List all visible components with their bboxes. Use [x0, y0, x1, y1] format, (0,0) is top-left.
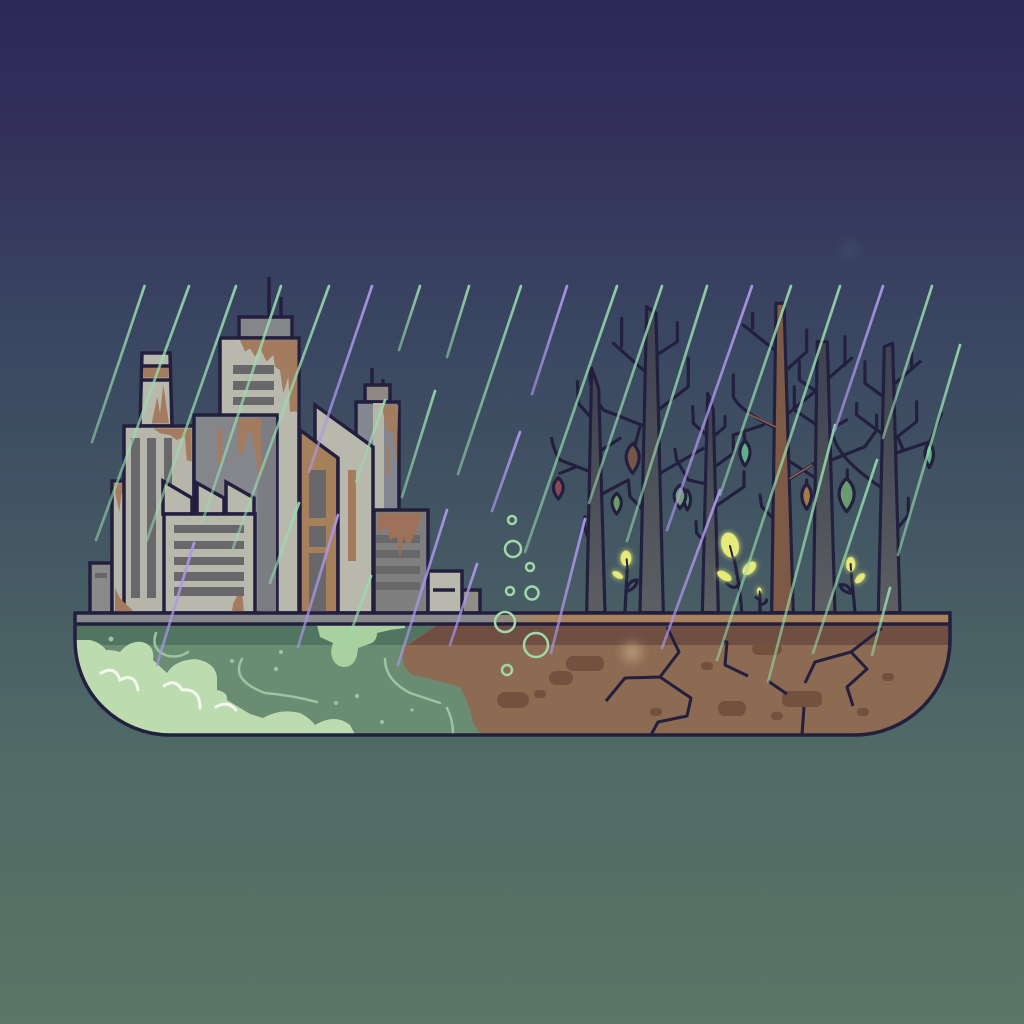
- island outline: [75, 613, 950, 735]
- building: small white box: [428, 571, 480, 613]
- glowing sprouts: [611, 530, 867, 612]
- building: rust-brown block: [300, 430, 338, 613]
- water swirls: [154, 633, 453, 733]
- building: slanted white wedge: [315, 405, 373, 613]
- soil rocks: [497, 643, 894, 720]
- sprout midribs: [627, 546, 851, 595]
- cross-section fill: [76, 626, 948, 734]
- building: top tower with cap and antenna: [220, 277, 299, 613]
- branches: [552, 313, 942, 542]
- tree trunks: [587, 303, 900, 613]
- faint sky glow: [843, 243, 857, 257]
- soil cracks: [606, 627, 882, 735]
- soil: [402, 620, 955, 738]
- dead forest: [552, 303, 942, 613]
- city skyline: [90, 277, 480, 613]
- hanging leaves: [553, 441, 934, 514]
- foam centre: [317, 625, 405, 667]
- building: gray centre tower: [194, 415, 277, 613]
- sprout leaves: [611, 530, 867, 595]
- polluted water: [102, 645, 480, 734]
- rain: purple streaks: [157, 286, 883, 665]
- sprout stems: [625, 548, 855, 612]
- building: tall left with vertical windows: [115, 426, 194, 613]
- soft light spot: [623, 644, 641, 660]
- chimney: [140, 353, 172, 426]
- foam left: [70, 640, 357, 740]
- building: right block with windows: [374, 510, 428, 613]
- building: factory with sawtooth roof: [163, 481, 255, 613]
- rising bubbles: [495, 516, 548, 675]
- building: small left box: [90, 563, 112, 613]
- water particles: [108, 636, 414, 724]
- white foam squiggles: [101, 670, 236, 710]
- floating ground island: [70, 613, 955, 740]
- brown branch highlights: [748, 414, 812, 478]
- ground slab: [75, 613, 950, 624]
- rain: green streaks: [92, 286, 960, 682]
- building: left low block: [112, 481, 135, 613]
- building: right tower with cap: [356, 368, 399, 512]
